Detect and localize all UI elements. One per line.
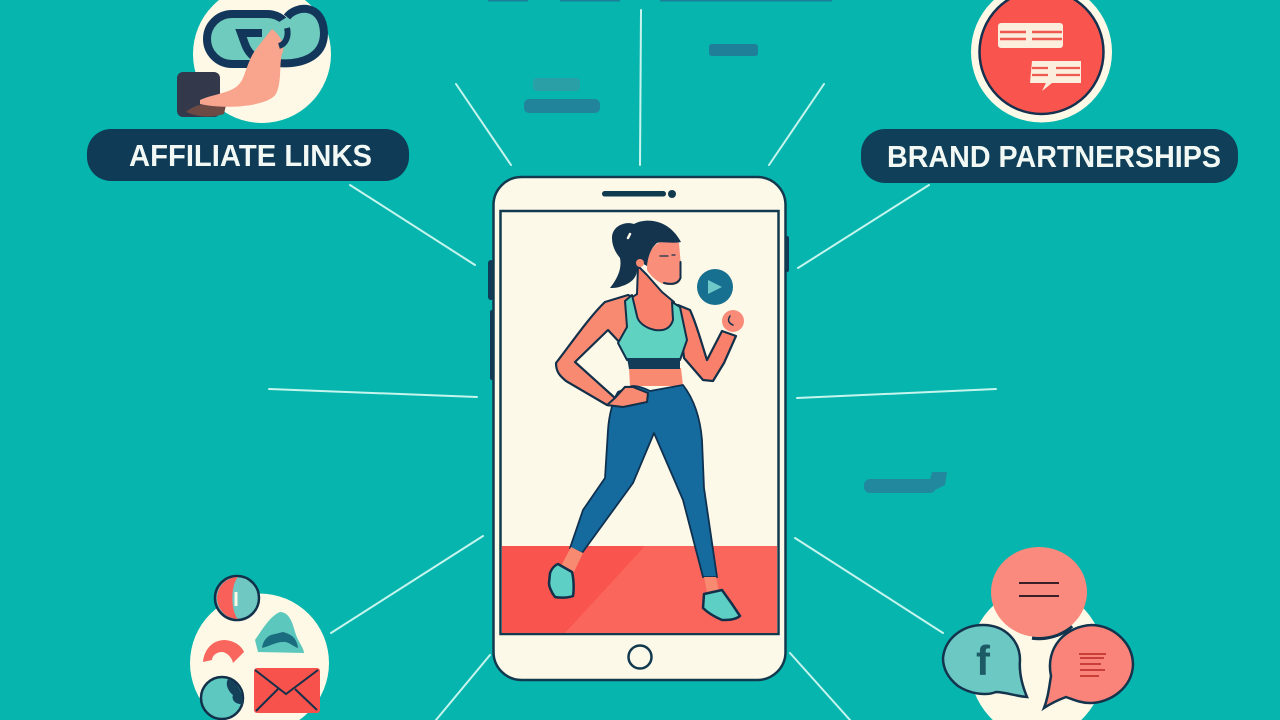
envelope: [254, 668, 320, 713]
teal sports top: [618, 295, 687, 360]
left arm and hand: [556, 295, 648, 407]
label pill: affiliate links: AFFILIATE LINKS: [129, 138, 372, 173]
right arm: [678, 305, 736, 381]
facebook bubble: [943, 625, 1027, 697]
right shoe: [703, 590, 740, 620]
red arc: [203, 640, 244, 663]
fist: [722, 310, 744, 332]
home button: [628, 646, 652, 668]
placeholder label dash: top centre right: [709, 44, 758, 56]
coral top bubble: [991, 547, 1087, 638]
midriff: [629, 368, 683, 386]
globe badge: [215, 576, 259, 620]
top underband: [627, 358, 680, 369]
speaker and camera: [602, 190, 676, 198]
screen: [500, 211, 778, 634]
icon: bottom-left social media cluster: [190, 576, 329, 720]
hair and ponytail: [610, 221, 681, 288]
ear: [636, 259, 644, 267]
facebook bubble: f: [976, 637, 991, 684]
neck and chest: [628, 266, 676, 340]
label pill: affiliate links: [87, 129, 409, 181]
icon: affiliate link with hand: [177, 0, 331, 123]
teal shape: [255, 612, 304, 653]
icon: play button: [697, 269, 733, 305]
icon: bottom-right speech bubbles: [943, 547, 1133, 720]
lower round badge: [201, 677, 243, 719]
face: [647, 240, 681, 285]
left shoe: [549, 564, 574, 598]
fitness woman illustration: [549, 221, 744, 620]
phone mockup: [488, 177, 789, 680]
phone side buttons: [488, 236, 789, 380]
coral text bubble: [1044, 625, 1133, 708]
label pill: brand partnerships: [861, 129, 1238, 183]
ankles: [560, 547, 719, 592]
red floor: [502, 546, 777, 633]
connector lines radiating from the phone: [269, 10, 996, 720]
leggings: [570, 385, 717, 577]
hand on hip: [607, 387, 648, 407]
icon: brand partnerships speech cards: [971, 0, 1112, 122]
label pill: brand partnerships: BRAND PARTNERSHIPS: [887, 139, 1221, 174]
placeholder label dashes: top centre left: [524, 78, 600, 113]
phone body: [494, 177, 786, 680]
placeholder label dash: right: [864, 472, 947, 493]
top edge label remnants: [488, 0, 832, 2]
